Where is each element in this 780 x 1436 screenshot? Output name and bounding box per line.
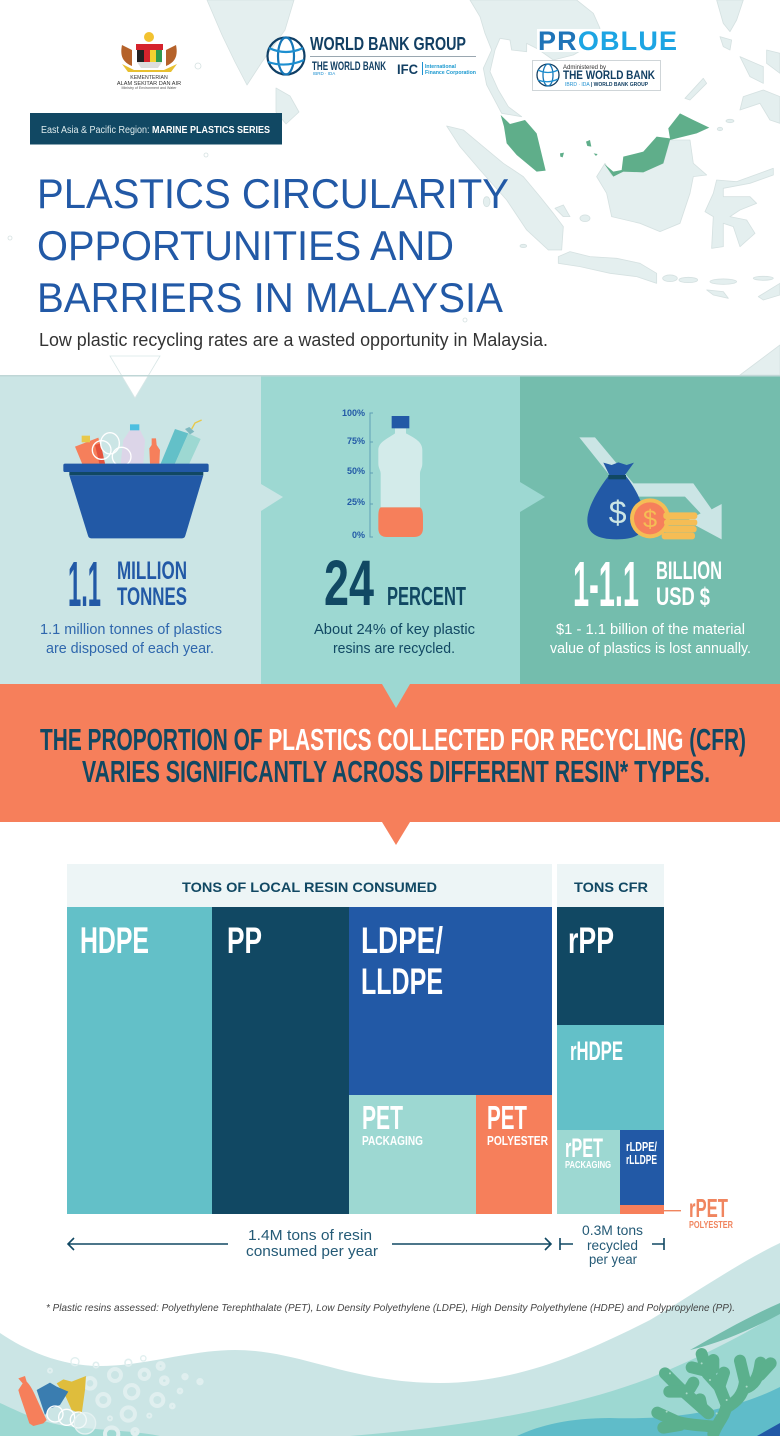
background map of Southeast Asia: [447, 0, 780, 300]
LDPE block: LLDPE: [361, 961, 443, 1002]
callout: rPET polyester: POLYESTER: [689, 1220, 734, 1231]
title: PLASTICS CIRCULARITY: [37, 170, 509, 217]
bubbles: [49, 1356, 202, 1436]
LDPE block: [349, 907, 552, 1095]
arrow between panels: [261, 484, 283, 511]
treemap: tons of local resin consumed: TONS OF LOCAL RESIN CONSUMED: [182, 879, 437, 895]
logo: World Bank Group: Finance Corporation: [425, 70, 476, 76]
title: OPPORTUNITIES AND: [37, 222, 454, 269]
PET polyester block: POLYESTER: [487, 1133, 548, 1148]
description: resins are recycled.: [333, 640, 455, 657]
background map: India and Sri Lanka: [8, 0, 780, 375]
label: recycled: recycled: [587, 1238, 638, 1253]
callout: rPET polyester: [664, 1193, 734, 1231]
HDPE block: [67, 907, 212, 1214]
logo: Malaysia ministry coat of arms: Ministry of Environment and Water: [122, 86, 177, 90]
rPET packaging block: PACKAGING: [565, 1160, 611, 1171]
stat: 24 percent: PERCENT: [387, 581, 466, 611]
PP block: PP: [227, 920, 262, 961]
treemap: tons CFR: [557, 864, 664, 1214]
PET packaging block: PET: [362, 1099, 403, 1136]
icon: money bag, coins and falling arrow: $: [643, 505, 657, 533]
stat: 24 percent: [324, 547, 466, 619]
arrow: recycled span: [560, 1238, 664, 1250]
footnote: * Plastic resins assessed: Polyethylene Terephthalate (PET), Low Density Polyethylene (LDPE), High Density Polyethylene (HDPE) and Polypropylene (PP).: [46, 1302, 735, 1314]
chart: bottle fill scale: [342, 408, 423, 540]
arrow between panels: [520, 482, 545, 512]
label: recycled: per year: [589, 1252, 637, 1267]
PET polyester block: PET: [487, 1099, 527, 1136]
chart: bottle fill scale: 100%: [342, 408, 365, 418]
stat: 1.1 million tonnes: TONNES: [117, 583, 187, 611]
rPET polyester sliver: [620, 1205, 664, 1214]
logo: World Bank Group: IBRD · IDA: [313, 71, 335, 76]
label: resin consumed: consumed per year: [246, 1243, 378, 1260]
logo: Malaysia ministry coat of arms: [117, 32, 181, 90]
PP block: [212, 907, 349, 1214]
label: recycled: 0.3M tons: [582, 1223, 643, 1238]
icon: money bag, coins and falling arrow: $: [609, 494, 627, 530]
stat: 1.1 million tonnes: MILLION: [117, 557, 187, 585]
description: 1.1 million tonnes of plastics: [40, 621, 222, 638]
label: resin consumed: 1.4M tons of resin: [248, 1227, 372, 1244]
callout: rPET polyester: rPET: [689, 1193, 728, 1223]
stat: 1.1 million tonnes: 1.1: [68, 548, 101, 620]
logo: Malaysia ministry coat of arms: KEMENTERIAN: [130, 75, 168, 81]
rPET packaging block: [557, 1130, 620, 1214]
logo: World Bank Group: International: [425, 64, 457, 70]
logo: PROBLUE: [532, 26, 678, 90]
rPET packaging block: rPET: [565, 1133, 603, 1163]
panel: percent recycled: [261, 376, 520, 684]
icon: bucket with plastics: [63, 420, 209, 538]
rPP block: rPP: [568, 920, 614, 961]
icon: money bag, coins and falling arrow: [579, 437, 722, 539]
footer waves: [0, 1243, 780, 1436]
logo: PROBLUE: THE WORLD BANK: [563, 70, 656, 82]
PET polyester block: [476, 1095, 552, 1214]
label: resin consumed: [246, 1227, 378, 1260]
stat: 1-1.1 billion USD: 1-1.1: [573, 548, 639, 620]
arrow: resin consumed span: [68, 1238, 551, 1250]
PET packaging block: [349, 1095, 476, 1214]
chart: bottle fill scale: 75%: [347, 436, 365, 446]
logo: World Bank Group: IFC: [397, 61, 418, 77]
icon: plastic bottle and bags: [18, 1376, 96, 1434]
description: [550, 621, 751, 657]
chart: bottle fill scale: 50%: [347, 466, 365, 476]
HDPE block: HDPE: [80, 920, 149, 961]
icon: coral: [657, 1354, 771, 1434]
logo: World Bank Group: THE WORLD BANK: [312, 59, 386, 73]
icon: globe: [268, 38, 304, 74]
label: recycled: [582, 1223, 643, 1267]
rLDPE block: rLLDPE: [626, 1152, 657, 1167]
description: [314, 621, 475, 657]
banner: CFR statement: [0, 684, 780, 845]
stat: 24 percent: 24: [324, 547, 374, 619]
series badge: East Asia & Pacific Region: MARINE PLASTICS SERIES: [41, 125, 270, 136]
subtitle: Low plastic recycling rates are a wasted opportunity in Malaysia.: [39, 329, 548, 350]
treemap: tons of local resin consumed: [67, 864, 552, 1214]
title: BARRIERS IN MALAYSIA: [37, 274, 503, 321]
PET packaging block: PACKAGING: [362, 1133, 423, 1148]
panel: plastics disposed: [0, 376, 261, 684]
description: [40, 621, 222, 657]
description: are disposed of each year.: [46, 640, 214, 657]
series badge: [30, 113, 282, 144]
rLDPE block: [620, 1130, 664, 1205]
stat: 1-1.1 billion USD: USD $: [656, 583, 710, 611]
panel: value lost: [520, 376, 780, 684]
description: About 24% of key plastic: [314, 621, 475, 638]
logo: PROBLUE: PROBLUE: [538, 26, 677, 56]
logo: World Bank Group: WORLD BANK GROUP: [310, 34, 466, 54]
LDPE block: LDPE/: [361, 920, 443, 961]
Malaysia highlighted on map: [501, 113, 709, 177]
triangle: pointer from subtitle: [110, 356, 160, 398]
logo: PROBLUE: IBRD · IDA | WORLD BANK GROUP: [565, 82, 649, 88]
chart: bottle fill scale: 0%: [352, 530, 365, 540]
stat: 1-1.1 billion USD: BILLION: [656, 557, 722, 585]
description: $1 - 1.1 billion of the material: [556, 621, 745, 638]
logo: World Bank Group: [268, 34, 476, 77]
rHDPE block: rHDPE: [570, 1036, 623, 1066]
rPP block: [557, 907, 664, 1025]
logo: PROBLUE: Administered by: [563, 64, 607, 71]
logo: Malaysia ministry coat of arms: ALAM SEKITAR DAN AIR: [117, 81, 181, 87]
rHDPE block: [557, 1025, 664, 1130]
title: [37, 170, 509, 321]
description: value of plastics is lost annually.: [550, 640, 751, 657]
rLDPE block: rLDPE/: [626, 1139, 657, 1154]
chart: bottle fill scale: 25%: [347, 497, 365, 507]
treemap: tons CFR: TONS CFR: [574, 879, 648, 895]
